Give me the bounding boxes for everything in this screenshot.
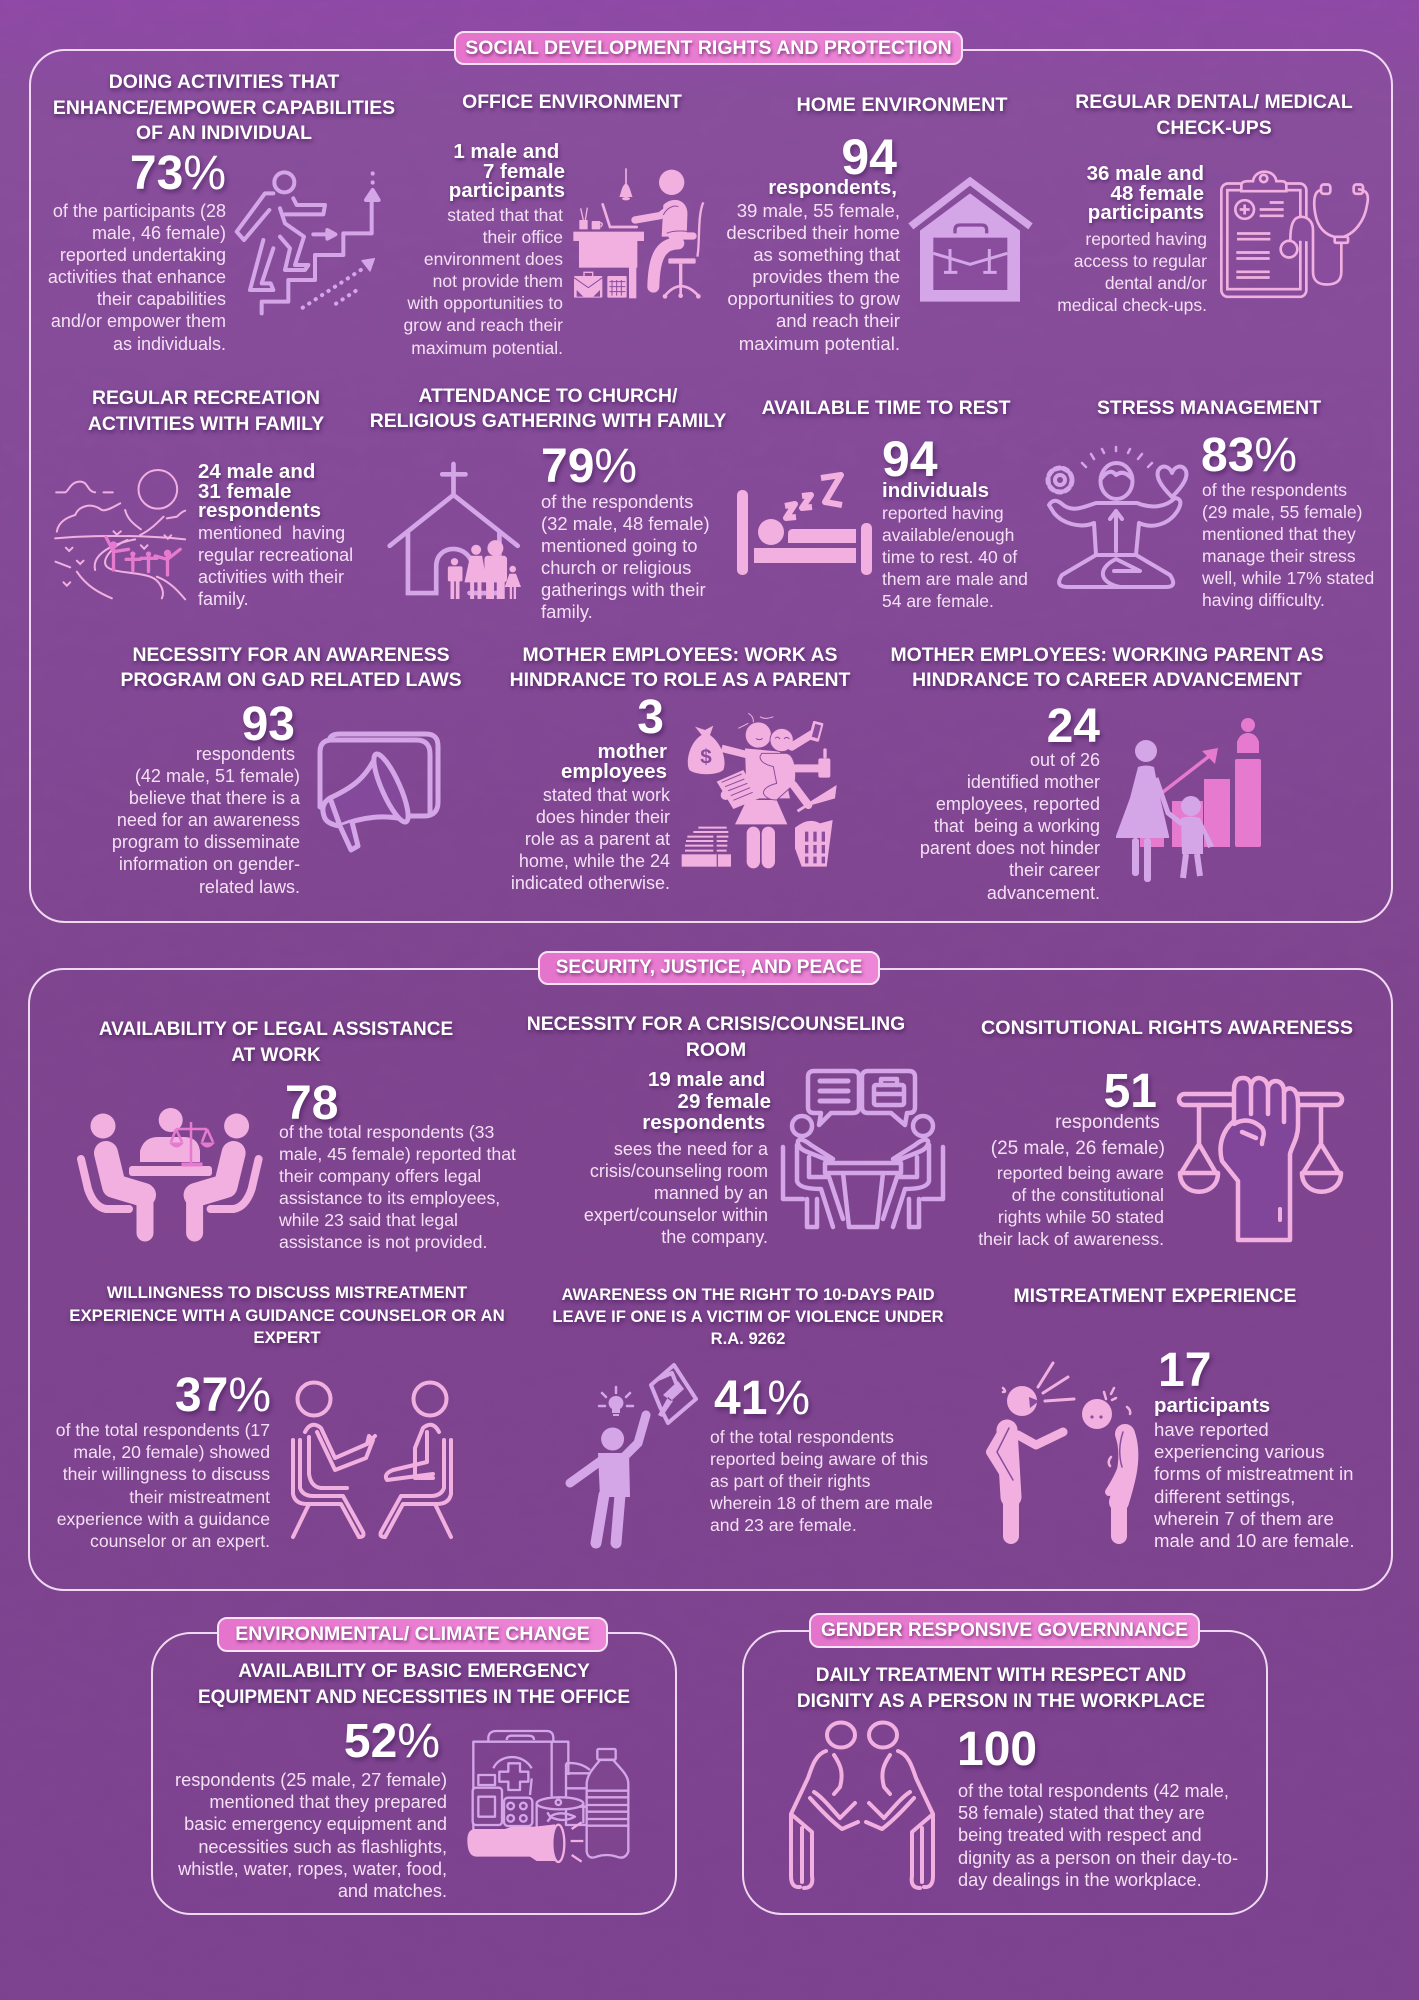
text: office stat: participants — [449, 179, 565, 202]
text: leave description: wherein 18 of them are male — [710, 1493, 933, 1513]
text: dental description — [1057, 229, 1207, 315]
heading: necessity for a crisis room — [527, 1012, 905, 1063]
text: emergency description: basic emergency equipment and — [184, 1814, 447, 1834]
text: activities: as individuals. — [113, 334, 226, 354]
text: leave description — [710, 1426, 933, 1536]
heading: constitutional rights awareness: CONSITUTIONAL RIGHTS AWARENESS — [981, 1017, 1353, 1039]
text: recreation stat: 31 female — [198, 480, 291, 502]
text: rest description: them are male and — [882, 569, 1028, 589]
heading: mother employees work as hindrance: HINDRANCE TO ROLE AS A PARENT — [510, 669, 850, 691]
text: office description: not provide them — [433, 271, 563, 291]
text: awareness description: need for an awareness — [117, 810, 300, 830]
text: mother employees label: mother — [598, 740, 667, 763]
text: respect description: 58 female) stated that they are — [958, 1803, 1205, 1823]
icon: emergency kit — [460, 1725, 640, 1870]
heading: availability of basic emergency equipment: EQUIPMENT AND NECESSITIES IN THE OFFICE — [198, 1686, 630, 1708]
text: legal description: of the total respondents (33 — [279, 1122, 494, 1142]
heading: mistreatment experience: MISTREATMENT EXPERIENCE — [1014, 1285, 1296, 1307]
text: mistreatment description: different settings, — [1154, 1486, 1295, 1507]
text: emergency description: whistle, water, ropes, water, food, — [178, 1859, 447, 1879]
text: home description: provides them the — [752, 266, 900, 287]
text: activities: activities that enhance — [48, 267, 226, 287]
text: dental stat: participants — [1088, 201, 1204, 224]
text: home description: described their home — [726, 222, 900, 243]
text: constitutional respondents: respondents — [1055, 1112, 1160, 1133]
text: home description: maximum potential. — [739, 333, 900, 354]
stat: 37%: 37% — [175, 1369, 271, 1422]
heading: office environment: OFFICE ENVIRONMENT — [462, 91, 682, 113]
text: mother employees label: employees — [561, 760, 667, 782]
heading: willingness to discuss: EXPERT — [253, 1328, 321, 1347]
section tag: environmental/climate change: ENVIRONMENTAL/ CLIMATE CHANGE — [235, 1623, 590, 1645]
icon: meditating person — [1046, 446, 1188, 589]
text: legal description: assistance is not provided. — [279, 1232, 487, 1252]
heading: availability of legal assistance: AVAILABILITY OF LEGAL ASSISTANCE — [99, 1019, 453, 1040]
section tag: gender responsive governance: GENDER RESPONSIVE GOVERNNANCE — [821, 1620, 1188, 1641]
text: leave description: as part of their rights — [710, 1471, 870, 1491]
icon: counseling table — [781, 1069, 945, 1232]
heading: regular recreation activities: REGULAR RECREATION — [92, 387, 320, 409]
text: awareness description: related laws. — [199, 877, 300, 897]
text: dental description: dental and/or — [1105, 273, 1207, 293]
stat: 24: 24 — [1047, 700, 1100, 753]
text: office description — [403, 205, 563, 358]
text: recreation stat: 24 male and — [198, 460, 315, 483]
text: legal description: male, 45 female) reported that — [279, 1144, 516, 1164]
text: activities: male, 46 female) — [92, 223, 226, 243]
heading: mother employees work as hindrance — [510, 644, 852, 691]
stat: 52%: 52% — [344, 1715, 440, 1768]
text: constitutional description: rights while 50 stated — [998, 1207, 1164, 1227]
text: church description: mentioned going to — [541, 535, 697, 556]
section tag: security, justice, and peace — [538, 951, 880, 985]
text: recreation stat: respondents — [198, 499, 321, 522]
heading: willingness to discuss: WILLINGNESS TO DISCUSS MISTREATMENT — [107, 1283, 467, 1302]
stat: 93: 93 — [242, 698, 295, 751]
text: willingness description: counselor or an expert. — [90, 1531, 270, 1551]
text: career description: that being a working — [934, 816, 1100, 836]
text: crisis stat — [642, 1069, 771, 1134]
heading: necessity for an awareness program — [120, 644, 464, 691]
heading: available time to rest: AVAILABLE TIME TO REST — [762, 397, 1010, 419]
text: respect description: day dealings in the workplace. — [958, 1870, 1202, 1890]
heading: mother employees working parent: HINDRANCE TO CAREER ADVANCEMENT — [912, 669, 1302, 691]
icon: overwhelmed mother — [680, 705, 850, 875]
text: constitutional description: their lack of awareness. — [978, 1229, 1164, 1249]
heading: stress management: STRESS MANAGEMENT — [1097, 397, 1321, 419]
text: career description: out of 26 — [1030, 750, 1100, 770]
heading: necessity for an awareness program: PROGRAM ON GAD RELATED LAWS — [120, 669, 462, 691]
text: awareness description — [112, 744, 300, 897]
text: crisis description: the company. — [661, 1227, 768, 1247]
text: stress description: (29 male, 55 female) — [1202, 502, 1362, 522]
heading: daily treatment with respect — [797, 1663, 1205, 1715]
text: church description: (32 male, 48 female) — [541, 513, 710, 534]
text: constitutional description — [978, 1162, 1164, 1250]
text: stress description: mentioned that they — [1202, 524, 1356, 544]
heading: daily treatment with respect: DIGNITY AS A PERSON IN THE WORKPLACE — [797, 1691, 1205, 1712]
text: crisis stat: 29 female — [678, 1090, 771, 1113]
text: office description: stated that that — [447, 205, 563, 225]
text: individuals label: individuals — [882, 479, 989, 502]
text: legal description: assistance to its employees, — [279, 1188, 500, 1208]
heading: regular dental/medical check-ups — [1075, 91, 1354, 138]
text: dental description: medical check-ups. — [1057, 295, 1207, 315]
heading: doing activities: ENHANCE/EMPOWER CAPABILITIES — [53, 96, 395, 118]
text: constitutional description: of the constitutional — [1012, 1185, 1164, 1205]
heading: willingness to discuss — [69, 1282, 505, 1350]
heading: attendance to church: ATTENDANCE TO CHURCH/ — [419, 385, 677, 407]
text: office description: their office — [483, 227, 563, 247]
text: willingness description: their willingness to discuss — [63, 1464, 270, 1484]
text: crisis description: crisis/counseling room — [590, 1161, 768, 1181]
icon: person at office desk — [573, 168, 704, 299]
text: mother employees label — [561, 740, 668, 785]
heading: mother employees working parent: MOTHER EMPLOYEES: WORKING PARENT AS — [890, 644, 1324, 666]
text: rest description: 54 are female. — [882, 591, 994, 611]
text: office description: with opportunities to — [407, 293, 563, 313]
stat: 3: 3 — [637, 691, 664, 744]
text: stress description: well, while 17% stated — [1202, 568, 1374, 588]
text: constitutional respondents: (25 male, 26 female) — [991, 1138, 1165, 1159]
text: constitutional description: reported being aware — [997, 1163, 1164, 1183]
section tag: environmental/climate change — [217, 1617, 608, 1652]
text: career description: their career — [1009, 860, 1100, 880]
stat: 78: 78 — [285, 1077, 338, 1130]
text: home description: and reach their — [776, 310, 900, 331]
heading: daily treatment with respect: DAILY TREATMENT WITH RESPECT AND — [816, 1665, 1186, 1686]
stat: 41%: 41% — [714, 1372, 810, 1425]
text: respect description — [958, 1780, 1238, 1891]
panel: environmental and climate change — [151, 1632, 677, 1915]
section tag: security, justice, and peace: SECURITY, JUSTICE, AND PEACE — [556, 957, 862, 978]
text: career description: identified mother — [967, 772, 1100, 792]
icon: fist holding scales — [1178, 1076, 1343, 1241]
text: crisis description: sees the need for a — [614, 1139, 768, 1159]
text: career description: advancement. — [987, 883, 1100, 903]
text: home description — [726, 200, 900, 354]
icon: person shouting at another — [987, 1362, 1140, 1545]
text: mistreatment description: have reported — [1154, 1419, 1269, 1440]
icon: two seated people talking — [291, 1382, 453, 1537]
text: mistreatment description: wherein 7 of them are — [1154, 1508, 1334, 1529]
icon: mother and child with bar chart — [1116, 718, 1262, 883]
text: mistreatment description — [1154, 1419, 1355, 1552]
heading: availability of legal assistance — [99, 1017, 453, 1068]
heading: awareness on the right to paid leave: LEAVE IF ONE IS A VICTIM OF VIOLENCE UNDER — [552, 1307, 944, 1326]
text: mother description: indicated otherwise. — [511, 873, 670, 893]
text: church description: church or religious — [541, 557, 691, 578]
icon: person sleeping in bed — [737, 472, 872, 575]
icon: church and family — [387, 462, 521, 599]
panel: social development rights and protection — [29, 49, 1393, 923]
text: recreation description — [198, 523, 353, 609]
stat: 94 individuals: 94 — [882, 431, 938, 487]
text: participants label: participants — [1154, 1394, 1270, 1417]
section tag: gender responsive governance — [809, 1613, 1200, 1648]
text: emergency description — [175, 1769, 447, 1902]
text: willingness description: of the total respondents (17 — [56, 1420, 270, 1440]
text: career description — [920, 749, 1100, 904]
text: mistreatment description: male and 10 are female. — [1154, 1530, 1355, 1551]
heading: awareness on the right to paid leave: R.A. 9262 — [711, 1329, 785, 1348]
icon: overwhelmed mother: $ — [700, 745, 712, 768]
text: office stat — [449, 140, 566, 204]
heading: necessity for a crisis room: NECESSITY FOR A CRISIS/COUNSELING — [527, 1013, 905, 1035]
heading: availability of legal assistance: AT WORK — [231, 1044, 321, 1066]
text: leave description: of the total respondents — [710, 1427, 894, 1447]
text: leave description: reported being aware of this — [710, 1449, 928, 1469]
text: church description: family. — [541, 601, 593, 622]
text: willingness description: male, 20 female) showed — [73, 1442, 270, 1462]
text: activities: reported undertaking — [60, 245, 226, 265]
text: activities — [48, 201, 226, 354]
text: mother description: home, while the 24 — [519, 851, 670, 871]
text: mother description — [511, 785, 670, 893]
text: mistreatment description: forms of mistreatment in — [1154, 1463, 1353, 1484]
text: crisis description: manned by an — [654, 1183, 768, 1203]
icon: megaphone — [318, 732, 440, 852]
text: emergency description: and matches. — [338, 1881, 447, 1901]
icon: family landscape — [54, 469, 186, 600]
heading: awareness on the right to paid leave — [552, 1284, 944, 1350]
text: awareness description: program to disseminate — [112, 832, 300, 852]
text: dental stat: 48 female — [1111, 182, 1204, 204]
stat: 100: 100 — [957, 1723, 1037, 1776]
heading: attendance to church — [370, 385, 728, 432]
stat: 51: 51 — [1104, 1065, 1157, 1118]
heading: availability of basic emergency equipment: AVAILABILITY OF BASIC EMERGENCY — [238, 1661, 590, 1682]
text: mother description: does hinder their — [536, 807, 670, 827]
heading: attendance to church: RELIGIOUS GATHERING WITH FAMILY — [370, 410, 726, 432]
text: respect description: dignity as a person on their day-to- — [958, 1848, 1238, 1868]
icon: legal meeting — [76, 1109, 264, 1241]
text: office description: environment does — [424, 249, 563, 269]
text: church description: of the respondents — [541, 491, 693, 512]
text: stress description: having difficulty. — [1202, 590, 1325, 610]
heading: regular recreation activities — [88, 387, 326, 434]
text: career description: employees, reported — [936, 794, 1100, 814]
text: mother description: role as a parent at — [525, 829, 670, 849]
heading: mother employees working parent — [890, 643, 1324, 692]
text: activities: of the participants (28 — [53, 201, 226, 221]
stat: 79%: 79% — [541, 440, 637, 493]
text: mother description: stated that work — [543, 785, 670, 805]
text: recreation description: activities with their — [198, 567, 344, 587]
stat: 73%: 73% — [130, 147, 226, 200]
text: recreation stat — [198, 460, 322, 524]
text: church description: gatherings with their — [541, 579, 706, 600]
heading: willingness to discuss: EXPERIENCE WITH A GUIDANCE COUNSELOR OR AN — [69, 1306, 505, 1324]
text: crisis stat: 19 male and — [648, 1068, 765, 1091]
heading: mother employees work as hindrance: MOTHER EMPLOYEES: WORK AS — [523, 644, 837, 666]
panel: gender responsive governance — [742, 1630, 1268, 1915]
section tag: social development rights and protection: SOCIAL DEVELOPMENT RIGHTS AND PROTECTION — [465, 37, 952, 59]
text: dental description: reported having — [1085, 229, 1207, 249]
text: stress description: of the respondents — [1202, 480, 1347, 500]
text: constitutional respondents — [991, 1110, 1165, 1162]
icon: person with idea and legal document — [566, 1363, 697, 1548]
text: emergency description: respondents (25 male, 27 female) — [175, 1770, 447, 1790]
text: emergency description: necessities such as flashlights, — [198, 1837, 447, 1857]
heading: regular dental/medical check-ups: REGULAR DENTAL/ MEDICAL — [1075, 91, 1353, 113]
text: legal description — [279, 1121, 516, 1254]
text: home description: 39 male, 55 female, — [737, 200, 900, 221]
icon: clipboard and stethoscope — [1220, 170, 1370, 298]
text: awareness description: information on gender- — [119, 854, 300, 874]
text: dental stat: 36 male and — [1087, 162, 1204, 185]
text: willingness description: their mistreatment — [129, 1487, 270, 1507]
heading: regular recreation activities: ACTIVITIES WITH FAMILY — [88, 412, 324, 434]
text: rest description: available/enough — [882, 525, 1014, 545]
heading: doing activities: OF AN INDIVIDUAL — [136, 122, 312, 144]
text: office stat: 1 male and — [453, 140, 559, 163]
text: awareness description: respondents — [196, 744, 295, 764]
text: respect description: being treated with respect and — [958, 1825, 1202, 1845]
text: dental stat — [1087, 162, 1206, 226]
icon: two people holding hands — [788, 1722, 936, 1888]
text: activities: and/or empower them — [51, 311, 226, 331]
heading: necessity for a crisis room: ROOM — [686, 1038, 746, 1060]
text: legal description: their company offers legal — [279, 1166, 481, 1186]
heading: availability of basic emergency equipment — [198, 1659, 630, 1710]
text: crisis description — [584, 1138, 768, 1248]
text: crisis description: expert/counselor within — [584, 1205, 768, 1225]
text: recreation description: regular recreational — [198, 545, 353, 565]
text: awareness description: believe that there is a — [129, 788, 300, 808]
heading: necessity for an awareness program: NECESSITY FOR AN AWARENESS — [132, 644, 450, 666]
text: office stat: 7 female — [483, 160, 565, 182]
heading: doing activities — [53, 71, 397, 144]
text: office description: grow and reach their — [403, 315, 563, 335]
text: recreation description: family. — [198, 589, 249, 609]
text: willingness description — [56, 1419, 270, 1552]
text: activities: their capabilities — [97, 289, 226, 309]
text: crisis stat: respondents — [642, 1111, 765, 1134]
heading: regular dental/medical check-ups: CHECK-UPS — [1156, 116, 1272, 138]
text: willingness description: experience with a guidance — [57, 1509, 270, 1529]
text: stress description — [1202, 480, 1374, 610]
text: mistreatment description: experiencing various — [1154, 1441, 1325, 1462]
text: home description: as something that — [753, 244, 900, 265]
text: emergency description: mentioned that they prepared — [209, 1792, 447, 1812]
text: leave description: and 23 are female. — [710, 1515, 857, 1535]
text: legal description: while 23 said that legal — [279, 1210, 458, 1230]
text: rest description: time to rest. 40 of — [882, 547, 1017, 567]
icon: person climbing stairs — [234, 170, 381, 316]
text: career description: parent does not hinder — [920, 838, 1100, 858]
text: dental description: access to regular — [1074, 251, 1207, 271]
stat: 94 respondents: 94 — [841, 129, 897, 185]
stat: 83%: 83% — [1201, 429, 1297, 482]
panel: security, justice, and peace — [28, 968, 1393, 1591]
text: rest description — [882, 503, 1028, 611]
text: rest description: reported having — [882, 503, 1004, 523]
text: respondents label: respondents, — [768, 176, 897, 199]
heading: doing activities: DOING ACTIVITIES THAT — [109, 71, 339, 93]
heading: awareness on the right to paid leave: AWARENESS ON THE RIGHT TO 10-DAYS PAID — [561, 1285, 935, 1304]
stat: 17: 17 — [1158, 1344, 1211, 1397]
heading: home environment: HOME ENVIRONMENT — [796, 94, 1008, 116]
text: church description — [541, 491, 710, 622]
icon: house with briefcase — [908, 176, 1032, 302]
text: home description: opportunities to grow — [727, 288, 900, 309]
text: awareness description: (42 male, 51 female) — [135, 766, 300, 786]
text: recreation description: mentioned having — [198, 523, 345, 543]
text: respect description: of the total respondents (42 male, — [958, 1781, 1229, 1801]
text: stress description: manage their stress — [1202, 546, 1356, 566]
text: office description: maximum potential. — [411, 338, 563, 358]
section tag: social development rights and protection — [454, 31, 963, 65]
